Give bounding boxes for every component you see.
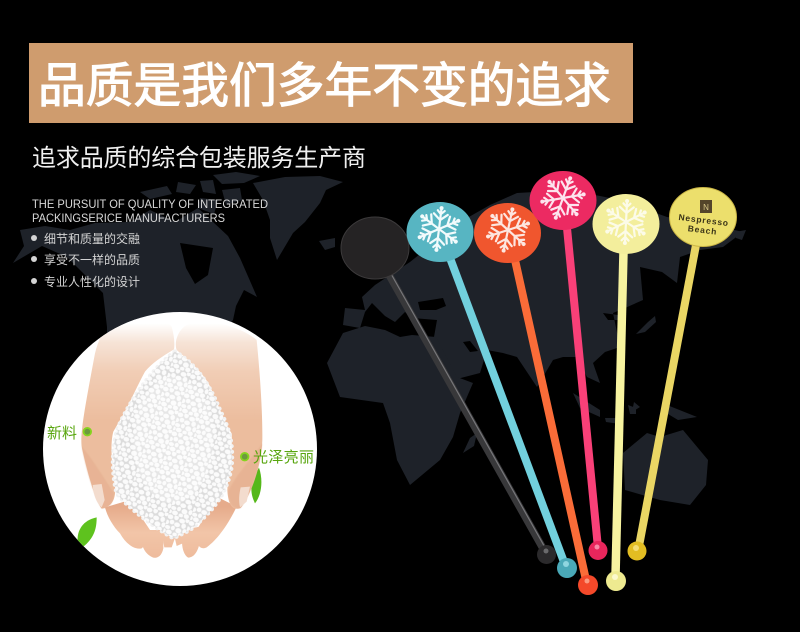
right hand bbox=[176, 322, 262, 509]
stirrer: pink bbox=[530, 168, 608, 560]
photo circle: hands holding pellets bbox=[43, 312, 317, 586]
map: greenland bbox=[253, 176, 343, 260]
stirrer: pale yellow bbox=[592, 194, 660, 591]
pellets bbox=[113, 352, 232, 538]
left hand bbox=[81, 318, 174, 509]
bullet list bbox=[31, 231, 140, 289]
english tagline: THE PURSUIT OF QUALITY OF INTEGRATED bbox=[32, 197, 268, 211]
map: madagascar bbox=[463, 433, 477, 453]
printed label: Nespresso bbox=[678, 212, 729, 228]
logo badge: N bbox=[703, 203, 709, 212]
finger nails bbox=[93, 484, 105, 507]
title banner bbox=[29, 43, 633, 123]
bullet list: 享受不一样的品质 bbox=[44, 252, 140, 267]
map: eurasia bbox=[343, 190, 743, 387]
leaf: right bbox=[251, 468, 261, 503]
callout: new material bbox=[47, 425, 91, 442]
printed label bbox=[677, 212, 729, 238]
bullet list: 专业人性化的设计 bbox=[44, 274, 140, 289]
map: arctic islands bbox=[140, 172, 260, 214]
subtitle: 追求品质的综合包装服务生产商 bbox=[32, 145, 366, 172]
leaf: lower left bbox=[78, 517, 97, 547]
callout: glossy finish: 光泽亮丽 bbox=[253, 449, 314, 466]
map: north and central america bbox=[13, 208, 257, 350]
stirrer: orange bbox=[474, 203, 598, 595]
stirrer: teal bbox=[406, 202, 577, 578]
map: southeast asia islands bbox=[573, 393, 697, 424]
fingers bbox=[105, 497, 237, 558]
english tagline bbox=[32, 197, 268, 225]
title text: 品质是我们多年不变的追求 bbox=[38, 60, 611, 113]
english tagline: PACKINGSERICE MANUFACTURERS bbox=[32, 211, 225, 225]
hand shading bbox=[82, 447, 114, 509]
bullet list: 细节和质量的交融 bbox=[44, 231, 140, 246]
map: africa bbox=[327, 326, 473, 485]
world map bbox=[13, 172, 746, 505]
map: japan bbox=[636, 316, 656, 334]
map: new zealand bbox=[735, 230, 746, 240]
logo badge bbox=[700, 200, 712, 213]
callout: new material: 新料 bbox=[47, 425, 77, 442]
stirrer: gold printed bbox=[628, 188, 736, 560]
map: iceland bbox=[319, 238, 335, 250]
map: australia bbox=[623, 430, 708, 505]
printed label: Beach bbox=[687, 223, 718, 237]
stirrer: black bbox=[341, 217, 556, 564]
